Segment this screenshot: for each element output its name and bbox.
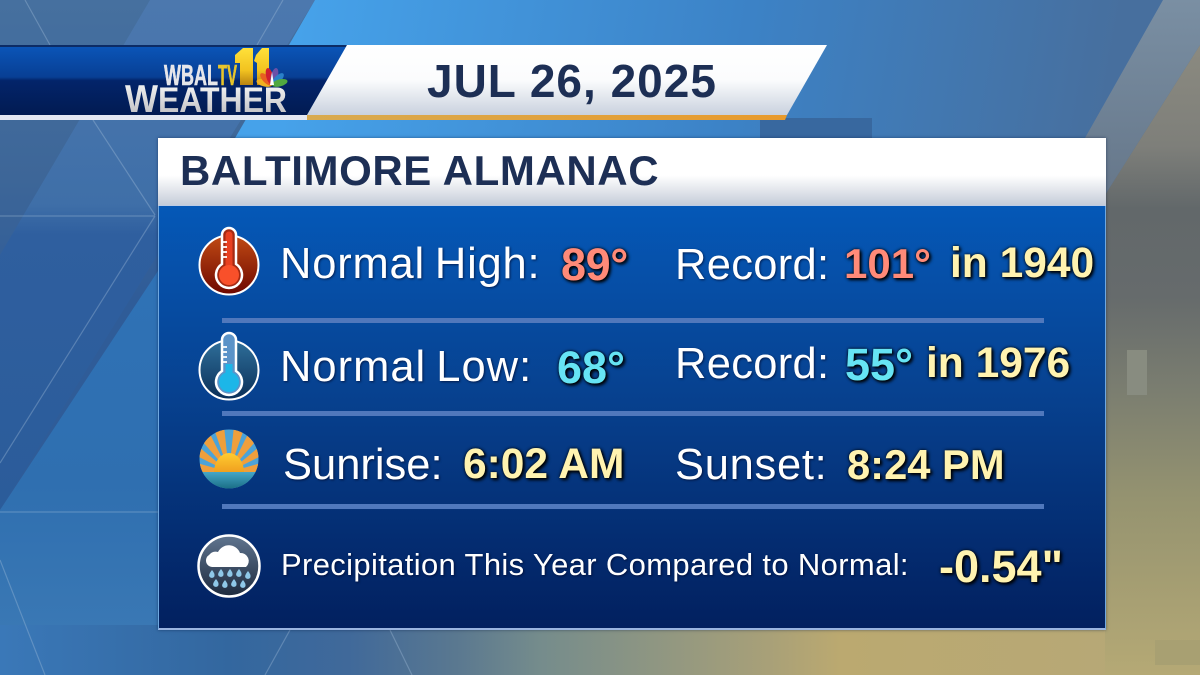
icon: hot thermometer bbox=[198, 226, 260, 296]
row: sunrise and sunset: 6:02 AM bbox=[463, 441, 624, 488]
icon: channel 11 numeral bbox=[235, 48, 269, 85]
row: normal low: Record: bbox=[675, 340, 829, 388]
logo text: WEATHER bbox=[125, 78, 287, 121]
row: precipitation: -0.54" bbox=[939, 541, 1063, 592]
logo text: WEATHER: W bbox=[125, 78, 158, 120]
date heading: JUL 26, 2025 bbox=[427, 55, 717, 107]
panel body bbox=[158, 206, 1106, 630]
row: normal high: 89° bbox=[561, 239, 628, 290]
row: normal high: Normal High: bbox=[280, 240, 540, 288]
row: normal high: in 1940 bbox=[950, 240, 1094, 287]
icon: cold thermometer bbox=[198, 332, 260, 400]
icon: sunrise bbox=[200, 430, 258, 488]
panel: Baltimore almanac bbox=[158, 138, 1106, 630]
row: normal low: Normal Low: bbox=[280, 343, 532, 391]
row: normal low: in 1976 bbox=[926, 340, 1070, 387]
icon: rain cloud bbox=[197, 534, 261, 598]
row: normal low: 68° bbox=[557, 342, 625, 393]
row: normal low: 55° bbox=[845, 339, 913, 390]
row: sunrise and sunset: 8:24 PM bbox=[847, 441, 1005, 488]
logo text: WBAL TV: TV bbox=[218, 60, 237, 92]
logo text: WBAL TV: WBAL bbox=[164, 60, 218, 92]
logo text: WEATHER: EATHER bbox=[158, 81, 287, 120]
icon: NBC peacock bbox=[256, 67, 288, 88]
row: sunrise and sunset: Sunrise: bbox=[283, 441, 443, 489]
row: normal high bbox=[280, 239, 1097, 290]
panel heading text: BALTIMORE ALMANAC bbox=[180, 147, 659, 194]
panel heading bar bbox=[158, 138, 1106, 206]
row: normal low bbox=[280, 339, 1073, 393]
row: precipitation bbox=[281, 541, 1064, 592]
row: sunrise and sunset bbox=[283, 441, 1006, 489]
row: normal high: 101° bbox=[844, 240, 931, 287]
row: sunrise and sunset: Sunset: bbox=[675, 441, 827, 489]
date banner bbox=[307, 45, 827, 120]
header banner: station logo bbox=[0, 45, 347, 120]
dividers bbox=[222, 318, 1044, 323]
row: precipitation: Precipitation This Year Compared to Normal: bbox=[281, 547, 909, 582]
row: normal high: Record: bbox=[675, 241, 829, 289]
